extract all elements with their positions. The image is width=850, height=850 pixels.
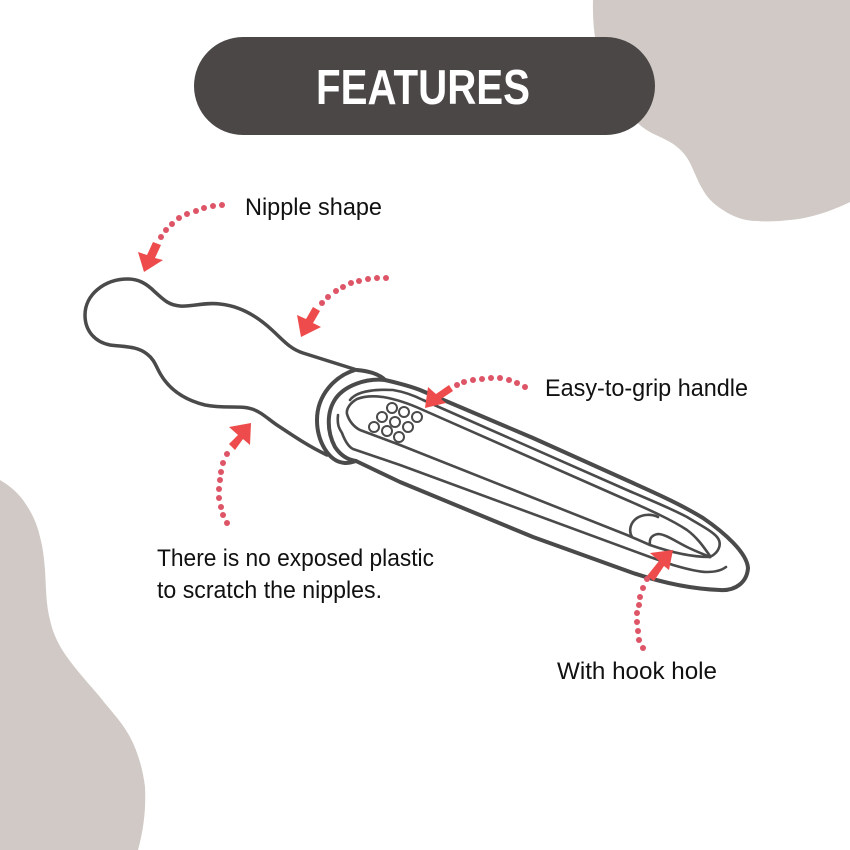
title pill bbox=[194, 37, 655, 135]
blob: top right background bbox=[593, 0, 850, 221]
arrow: upper neck bbox=[297, 275, 389, 337]
grip window line B bbox=[347, 396, 710, 557]
label: with hook hole: With hook hole bbox=[557, 658, 717, 685]
handle outer contour bbox=[329, 380, 748, 590]
arrow: hook hole bbox=[634, 550, 673, 651]
label: easy-to-grip handle: Easy-to-grip handle bbox=[545, 375, 748, 402]
collar ring bbox=[317, 370, 385, 463]
label: nipple shape: Nipple shape bbox=[245, 194, 382, 221]
hook hole bbox=[630, 515, 710, 557]
arrow: nipple shape bbox=[138, 202, 225, 272]
title text: FEATURES bbox=[316, 61, 530, 115]
arrow: easy-to-grip handle bbox=[425, 375, 528, 408]
product illustration: nipple massager bbox=[85, 279, 748, 590]
silicone nipple outline bbox=[85, 279, 357, 455]
grip lower line C bbox=[338, 415, 726, 572]
label: no exposed plastic: to scratch the nipples. bbox=[157, 577, 382, 604]
label: no exposed plastic bbox=[157, 545, 434, 604]
grip inner line A bbox=[350, 390, 720, 557]
label: no exposed plastic: There is no exposed plastic bbox=[157, 545, 434, 572]
arrow: no exposed plastic bbox=[216, 423, 251, 526]
blob: bottom left background bbox=[0, 480, 145, 850]
grip dots bbox=[369, 403, 422, 442]
